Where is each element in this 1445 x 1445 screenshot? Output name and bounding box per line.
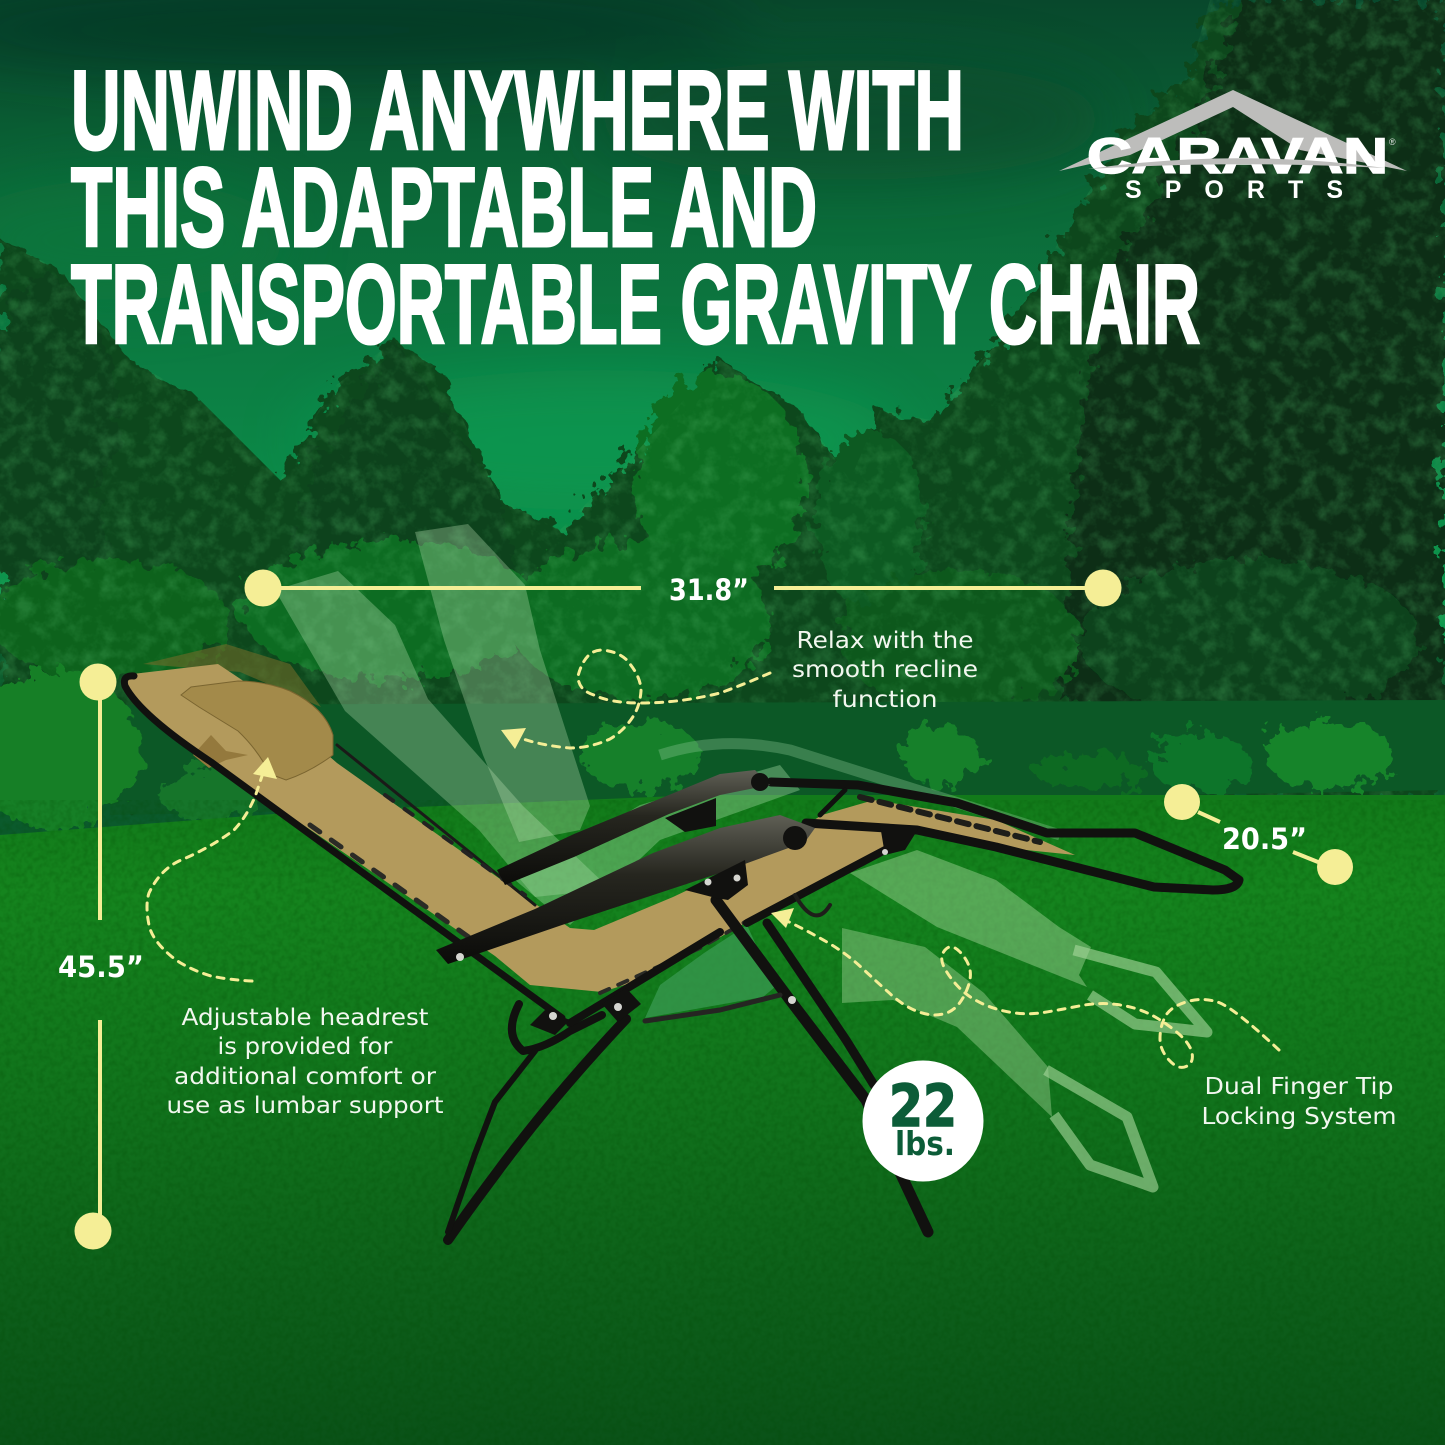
background: fence <box>110 700 1445 815</box>
callout: locking system text: Locking System <box>1202 1104 1396 1130</box>
weight badge: 22 lbs: 22 <box>889 1072 957 1140</box>
chair: far armrest <box>497 770 770 885</box>
dimension: 31.8 inch width: 31.8” <box>669 573 749 607</box>
chair: near armrest <box>436 815 815 964</box>
callout: locking system text: Dual Finger Tip <box>1204 1074 1394 1100</box>
arrow: headrest dashed <box>147 757 277 981</box>
dimension: 31.8 inch width <box>244 570 1122 607</box>
callout: recline text: function <box>832 687 938 713</box>
background: foliage mottling <box>0 0 1445 810</box>
arrow: locking system dashed <box>771 908 1279 1067</box>
chair: pivot brackets <box>456 773 920 1035</box>
dimension: 45.5 inch height: 45.5” <box>58 950 144 984</box>
background: lawn <box>0 795 1445 1445</box>
background: lawn texture <box>0 800 1445 1445</box>
weight badge: 22 lbs <box>862 1060 984 1182</box>
ghost chair: reclined back positions <box>143 524 1060 925</box>
dimension: 20.5 inch depth: 20.5” <box>1222 822 1307 856</box>
callout: headrest text: use as lumbar support <box>166 1093 444 1119</box>
chair: headrest pillow <box>181 681 333 780</box>
callout: headrest text <box>166 1005 444 1119</box>
chair: fabric <box>124 664 1075 992</box>
callout: headrest text: Adjustable headrest <box>182 1005 428 1031</box>
background: sky <box>0 0 1445 640</box>
background: clouds <box>0 0 1110 510</box>
dimension: 20.5 inch depth <box>1164 784 1353 885</box>
weight badge: 22 lbs: lbs. <box>895 1124 955 1163</box>
background: bushes <box>0 670 1395 830</box>
callout: headrest text: additional comfort or <box>174 1064 437 1090</box>
ghost chair: lowered footrest positions <box>645 850 1207 1187</box>
chair: frame <box>124 676 1239 1240</box>
title: THIS ADAPTABLE AND <box>71 145 817 270</box>
background: tree line <box>0 0 1445 810</box>
logo: Caravan Sports <box>1059 90 1407 204</box>
logo: Caravan Sports: SPORTS <box>1125 176 1343 204</box>
callout: recline text: Relax with the <box>796 628 974 654</box>
logo: Caravan Sports: ® <box>1389 137 1396 147</box>
chair: headrest strap <box>193 735 248 768</box>
chair: seat lacing <box>310 745 1040 993</box>
logo: Caravan Sports: CARAVAN <box>1087 128 1388 184</box>
callout: recline text <box>792 628 978 713</box>
callout: headrest text: is provided for <box>218 1034 393 1060</box>
title <box>71 48 1200 367</box>
arrow: recline dashed <box>501 650 770 749</box>
callout: locking system text <box>1202 1074 1396 1130</box>
dimension: 45.5 inch height <box>58 664 144 1250</box>
callout: recline text: smooth recline <box>792 657 978 683</box>
